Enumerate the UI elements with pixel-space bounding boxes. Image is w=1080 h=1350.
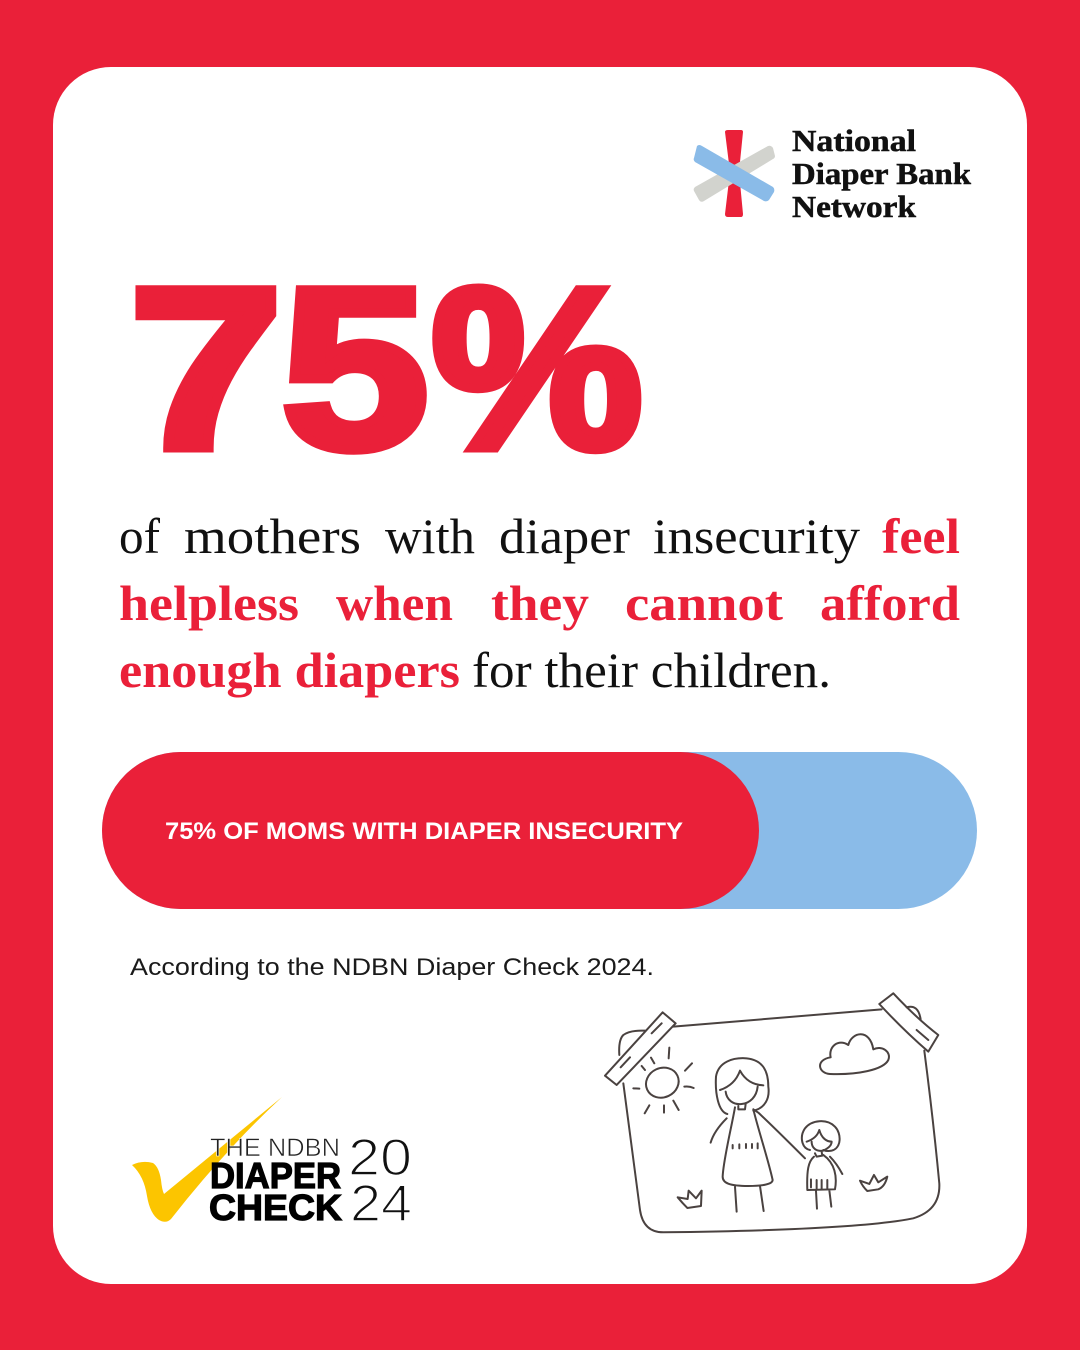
big statistic 75%: % xyxy=(431,240,643,497)
wordmark: check: CHECK xyxy=(209,1187,342,1228)
wordmark: diaper: DIAPER xyxy=(210,1155,341,1196)
line 2: helpless xyxy=(119,575,299,631)
line 2: when xyxy=(336,575,453,631)
big statistic 75%: 7 xyxy=(129,240,283,497)
line 1: mothers xyxy=(184,508,361,564)
icon: logo asterisk xyxy=(694,130,775,217)
line 2: they xyxy=(491,575,589,631)
year 20: 20 xyxy=(348,1129,412,1187)
bar label: 75% OF MOMS WITH DIAPER INSECURITY xyxy=(165,818,683,845)
line 3: enough diapers xyxy=(119,642,460,698)
icon: yellow check mark xyxy=(132,1097,282,1222)
logo: National Diaper Bank Network xyxy=(694,123,979,224)
logo wordmark: Network xyxy=(792,189,917,224)
cloud xyxy=(820,1034,889,1074)
line 1: feel xyxy=(882,508,960,564)
grass left xyxy=(678,1191,702,1208)
tape right xyxy=(879,993,938,1052)
line 3: for their children. xyxy=(472,642,831,698)
line 2: afford xyxy=(820,575,960,631)
bar track xyxy=(102,752,977,909)
child xyxy=(802,1121,842,1209)
line 1: with xyxy=(385,508,475,564)
year 24: 24 xyxy=(350,1175,412,1233)
logo wordmark: Diaper Bank xyxy=(792,156,972,191)
wordmark: the NDBN: THE NDBN xyxy=(210,1134,340,1162)
mother xyxy=(711,1058,805,1212)
illustration: child's drawing of mother and child xyxy=(605,993,939,1232)
sun xyxy=(633,1048,694,1113)
line 1: of xyxy=(119,508,160,564)
tape left xyxy=(605,1012,676,1085)
logo wordmark: National xyxy=(792,123,916,158)
paper outline xyxy=(619,1007,939,1232)
logo: Diaper Check 2024 xyxy=(132,1097,412,1233)
grass right xyxy=(860,1175,887,1191)
progress bar xyxy=(102,752,977,909)
statement text xyxy=(119,508,960,698)
big statistic 75%: 5 xyxy=(281,240,429,497)
bar fill 75% xyxy=(102,752,759,909)
source note: According to the NDBN Diaper Check 2024. xyxy=(130,954,654,981)
line 2: cannot xyxy=(625,575,783,631)
line 1: diaper xyxy=(499,508,630,564)
line 1: insecurity xyxy=(653,508,860,564)
